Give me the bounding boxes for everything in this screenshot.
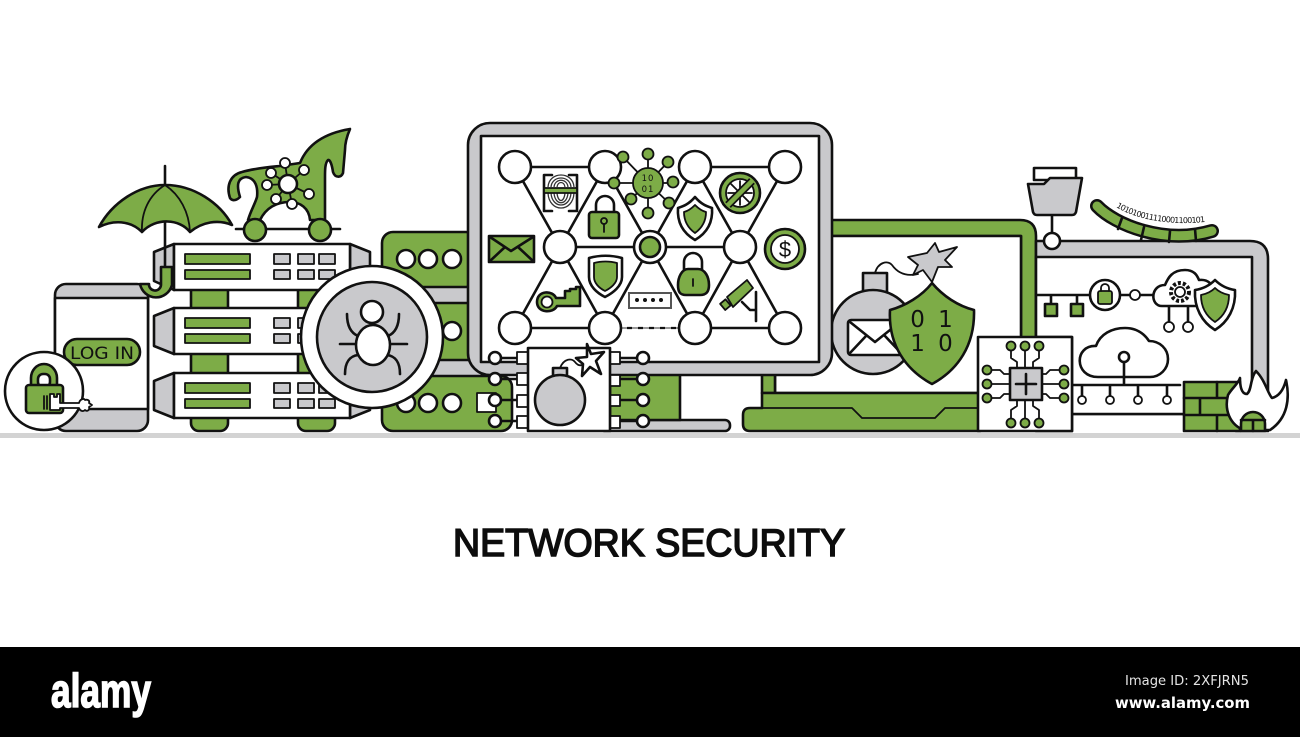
panel: server rack stack xyxy=(154,244,370,431)
footer bar xyxy=(0,647,1300,737)
icon: large cloud network xyxy=(1072,328,1180,404)
icon: trojan horse xyxy=(228,129,350,241)
alamy logo: alamy xyxy=(51,664,151,717)
icon: lock and key badge xyxy=(5,352,92,430)
website: www.alamy.com xyxy=(1115,694,1250,712)
icon: envelope xyxy=(489,236,534,262)
server unit 3 xyxy=(154,373,370,418)
LOG IN button xyxy=(64,339,140,365)
icon: fingerprint scanner xyxy=(544,175,577,211)
folder node xyxy=(1028,168,1082,249)
icon: dollar coin: $ xyxy=(779,237,791,262)
icon: firewall bricks xyxy=(1184,382,1240,431)
icon: binary shield: 0 1 xyxy=(910,307,956,333)
panel: main monitor xyxy=(468,123,832,375)
image id: Image ID: 2XFJRN5 xyxy=(1125,673,1249,689)
icon: binary shield xyxy=(890,283,974,384)
icon: virus: 01 xyxy=(642,185,654,195)
server unit 2 xyxy=(154,308,370,354)
panel: green server tower xyxy=(382,232,512,431)
icon: binary shield: 1 0 xyxy=(910,331,956,357)
network mesh xyxy=(499,151,801,344)
ground strip xyxy=(0,433,1300,438)
icon: virus: 10 xyxy=(642,174,654,184)
panel: login screen xyxy=(55,284,148,431)
icon: bomb xyxy=(535,344,604,425)
icon: round padlock xyxy=(678,253,709,295)
title: NETWORK SECURITY xyxy=(453,522,845,565)
icon: padlock xyxy=(589,196,619,238)
panel: circuit chip xyxy=(978,337,1072,431)
icon: virus xyxy=(608,148,678,218)
panel: right monitor xyxy=(1026,166,1290,432)
icon: bug in magnifier xyxy=(301,266,443,408)
icon: virus blocked xyxy=(720,173,760,213)
icon: dollar coin xyxy=(765,229,805,269)
icon: password field xyxy=(629,293,671,308)
panel: bomb chip xyxy=(489,344,649,431)
icon: envelope bomb xyxy=(831,243,957,374)
icon: data worm xyxy=(1090,199,1219,244)
icon: small cloud with gear and shield xyxy=(1153,270,1235,330)
icon: umbrella xyxy=(99,166,232,297)
icon: security camera xyxy=(720,280,756,321)
icon: data worm: 101010011110001100101 xyxy=(1116,202,1205,224)
panel: laptop xyxy=(743,220,1036,431)
icon: solid shield xyxy=(589,256,622,297)
icon: flame xyxy=(1227,371,1288,431)
network row xyxy=(1036,280,1193,332)
icon: shield outline xyxy=(678,197,712,240)
icon: key xyxy=(537,287,580,311)
LOG IN button: LOG IN xyxy=(70,344,134,364)
panel: desktop monitor stand xyxy=(600,370,730,431)
server unit 1 xyxy=(154,244,370,290)
